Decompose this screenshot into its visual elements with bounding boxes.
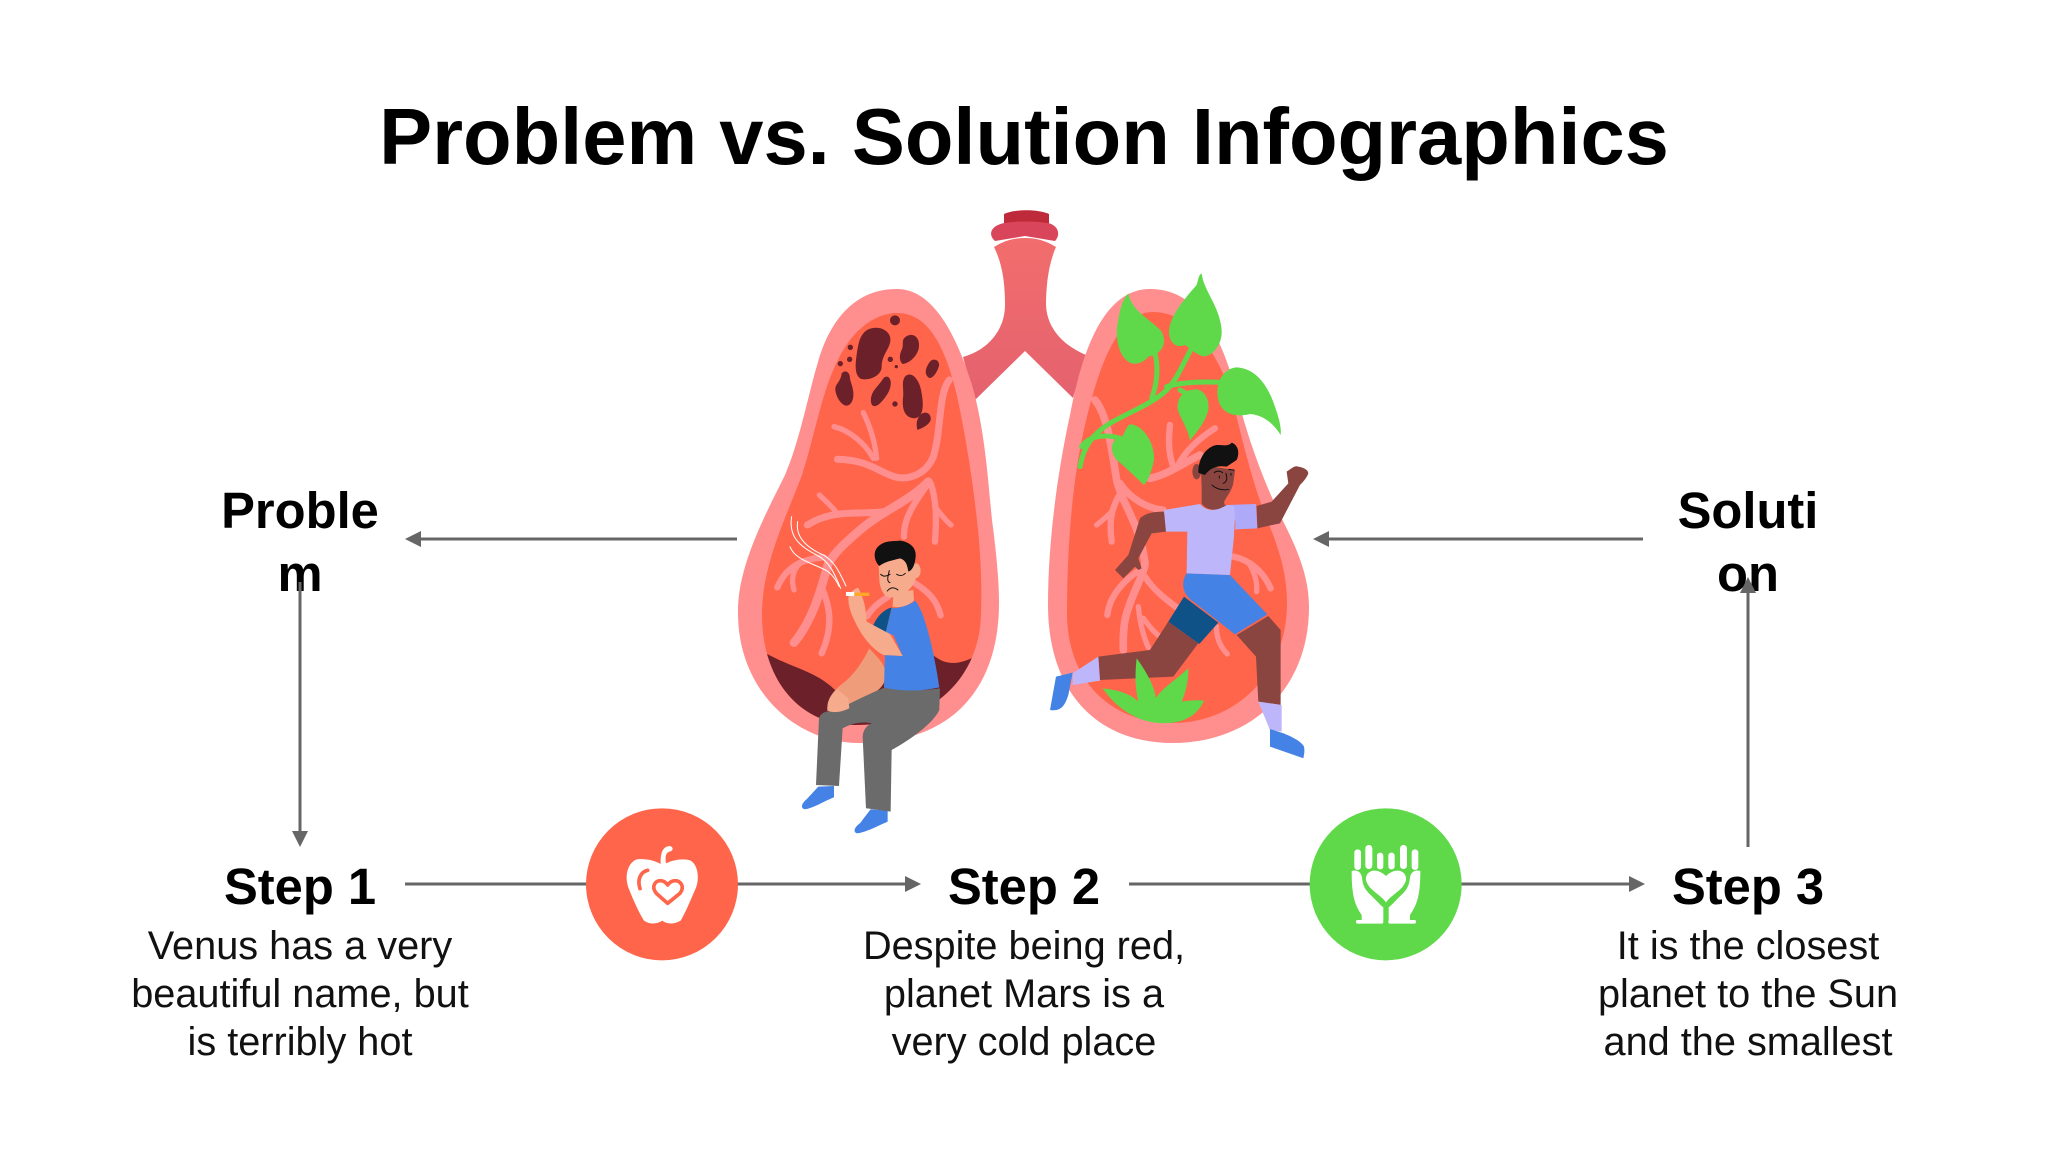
back arm (828, 648, 886, 712)
front arm and hand (848, 588, 903, 656)
hair (875, 541, 916, 572)
trousers (816, 687, 940, 812)
step 1 description (131, 924, 469, 1064)
step 2 description (863, 924, 1185, 1064)
step 1 text (131, 858, 469, 1064)
socks (1073, 657, 1282, 732)
fingers (1354, 849, 1361, 870)
leaves (1112, 273, 1281, 485)
smoke (790, 517, 846, 588)
step 1 description: is terribly hot (188, 1020, 412, 1064)
face lines (881, 571, 905, 591)
bronchi (1095, 400, 1271, 654)
shirt (1227, 504, 1257, 529)
solution icon: hands and heart (1310, 808, 1462, 960)
lung inner tissue (762, 313, 981, 725)
face lines (1212, 469, 1234, 490)
apple (627, 846, 698, 924)
left hand (1352, 870, 1383, 921)
neck and head (893, 590, 914, 607)
step 3 description: It is the closest (1617, 924, 1879, 968)
step 1 description: Venus has a very (148, 924, 452, 968)
dark tar band (767, 654, 972, 725)
label: Solution (1678, 482, 1818, 602)
lung inner tissue (1067, 312, 1287, 723)
step 3 description: and the smallest (1604, 1020, 1892, 1064)
left lung (738, 289, 999, 743)
title: Problem vs. Solution Infographics (379, 92, 1669, 181)
illustration and connectors (292, 210, 1756, 960)
arrow: Step 3 to Solution (1740, 577, 1756, 847)
tar spots (835, 315, 939, 430)
arrow: lungs to Solution (1313, 531, 1643, 547)
arrow: lungs to Problem (405, 531, 737, 547)
cigarette (846, 592, 869, 596)
label: Problem: m (277, 545, 323, 602)
hair (1198, 443, 1238, 475)
label: Problem: Proble (221, 482, 379, 539)
right lung (1048, 273, 1309, 743)
head (1201, 465, 1235, 510)
step 3 heading: Step 3 (1672, 858, 1824, 915)
ground plant overlap (1136, 658, 1188, 705)
legs (1098, 616, 1281, 705)
shoes (1050, 673, 1304, 758)
right hand (1389, 870, 1420, 921)
feet (802, 786, 888, 833)
label: Problem (221, 482, 379, 602)
step 2 description: Despite being red, (863, 924, 1185, 968)
hand on knee (827, 689, 849, 712)
bronchi (834, 380, 949, 478)
step 1 heading: Step 1 (224, 858, 376, 915)
person: smoker (790, 517, 940, 833)
step 3 description (1598, 924, 1898, 1064)
heart (1366, 871, 1406, 902)
red circle (586, 808, 738, 960)
arms (1115, 512, 1166, 578)
step 2 description: very cold place (892, 1020, 1156, 1064)
shorts (1168, 597, 1218, 644)
lung outer wall (738, 289, 999, 743)
lung outer wall (1048, 289, 1309, 743)
ground plant (1103, 658, 1204, 723)
arrow: Step 1 to Step 2 (405, 876, 921, 892)
shirt (884, 601, 939, 691)
step 1 description: beautiful name, but (131, 972, 469, 1016)
arrow: Problem to Step 1 (292, 582, 308, 847)
vine and leaves (1080, 273, 1281, 485)
arrow: Step 2 to Step 3 (1129, 876, 1645, 892)
step 3 description: planet to the Sun (1598, 972, 1898, 1016)
problem icon: apple (586, 808, 738, 960)
green circle (1310, 808, 1462, 960)
label: Solution: Soluti (1678, 482, 1818, 539)
person: runner (1050, 443, 1308, 758)
label: Solution: on (1717, 545, 1779, 602)
step 3 text (1598, 858, 1898, 1064)
trachea (963, 210, 1086, 400)
vine stems (1080, 350, 1223, 467)
step 2 heading: Step 2 (948, 858, 1100, 915)
step 2 description: planet Mars is a (884, 972, 1164, 1016)
step 2 text (863, 858, 1185, 1064)
